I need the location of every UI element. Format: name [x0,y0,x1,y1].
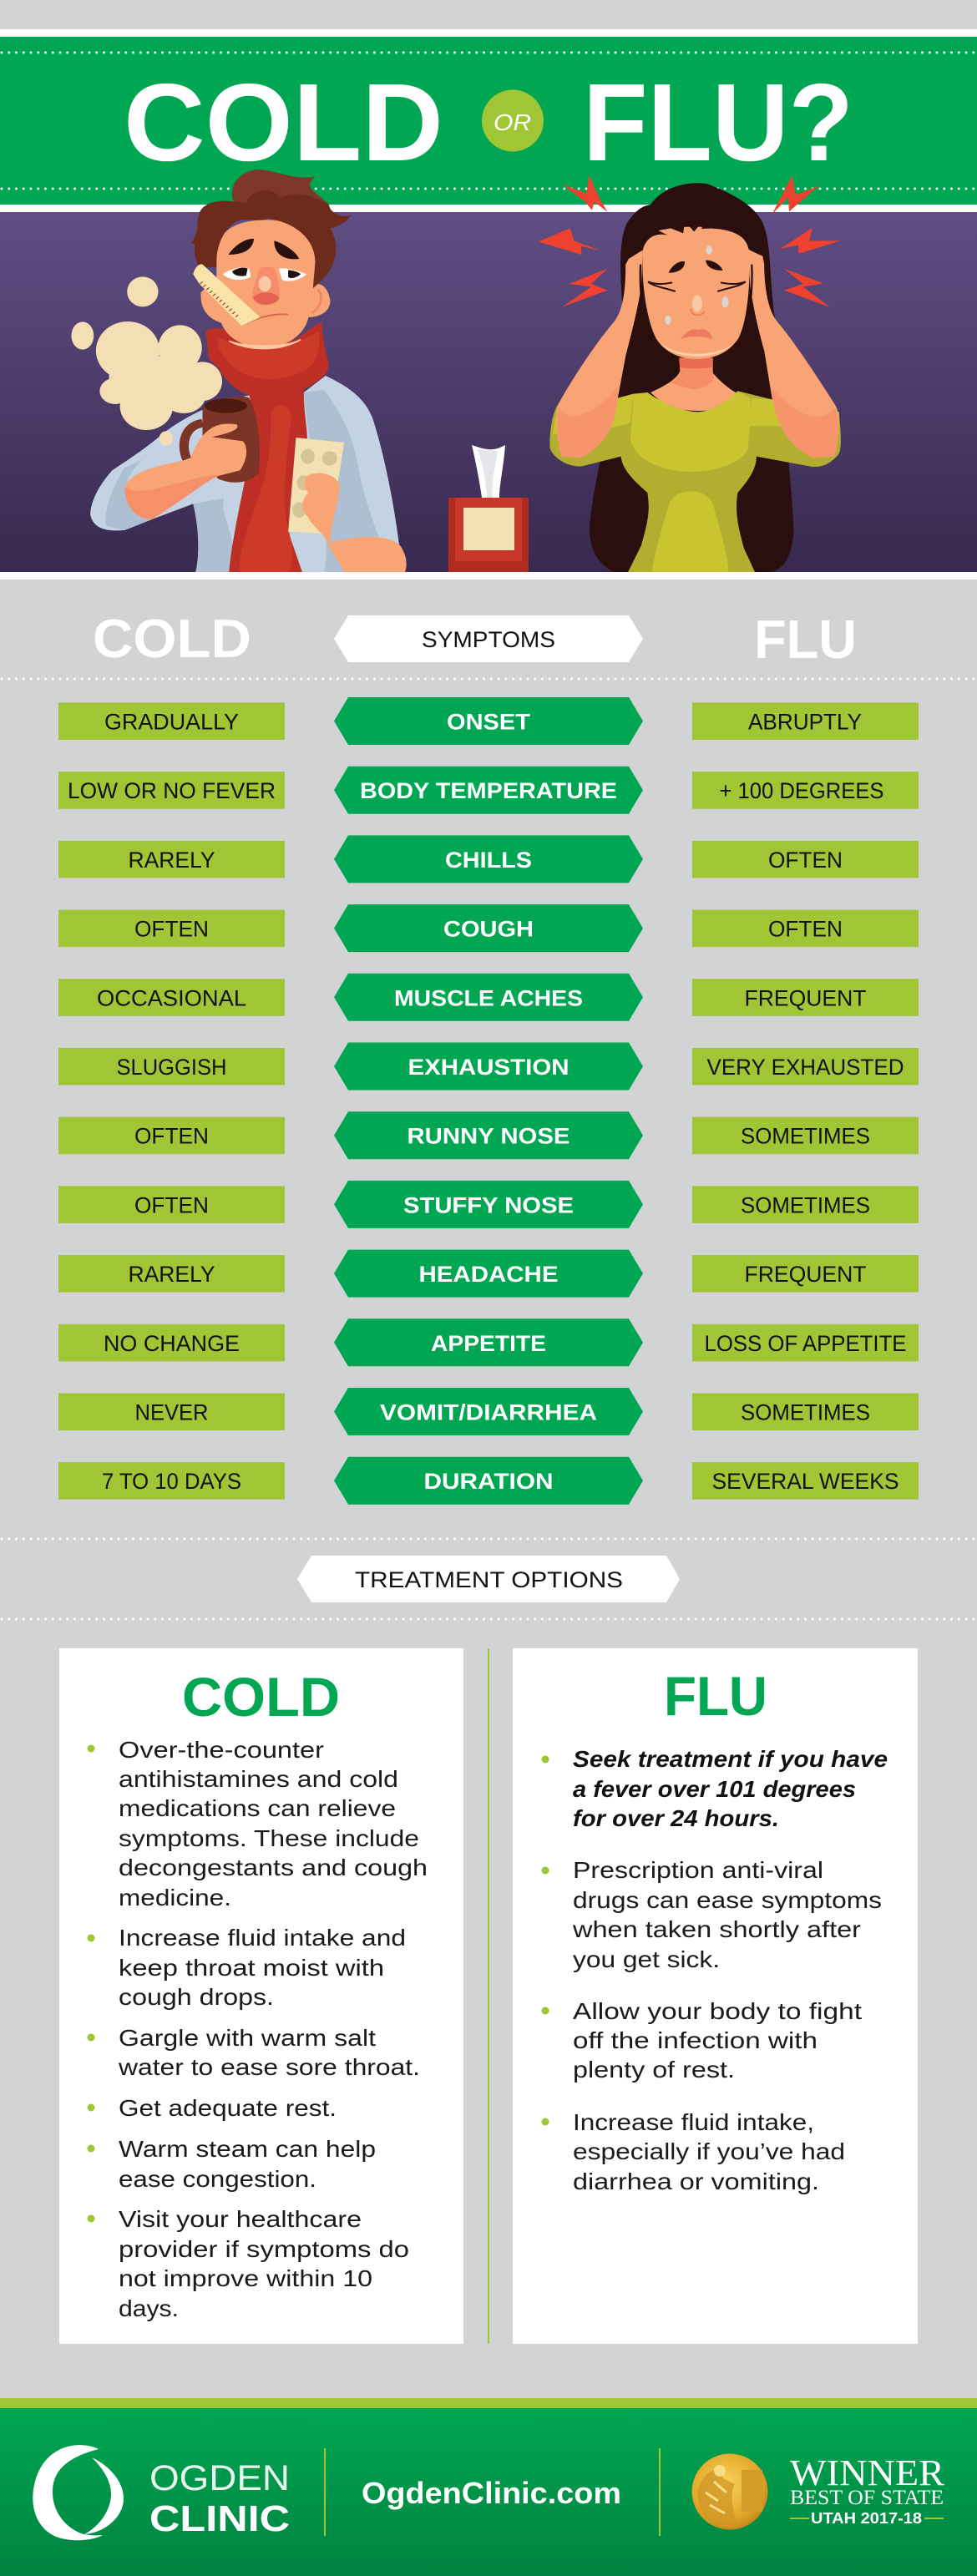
cold bullets: provider if symptoms do [119,2236,409,2262]
flu bullets: especially if you’ve had [573,2138,845,2164]
row: duration: SEVERAL WEEKS [711,1469,899,1494]
row: chills: OFTEN [768,848,843,873]
title: FLU?: FLU? [583,61,853,184]
illustration panel background [0,212,977,572]
flu bullets: for over 24 hours. [573,1805,779,1831]
top [549,391,841,572]
row: duration: 7 TO 10 DAYS [102,1469,241,1494]
steam cloud [71,276,222,446]
row: muscle aches: OCCASIONAL [97,985,246,1010]
row: vomit/diarrhea: VOMIT/DIARRHEA [380,1399,597,1425]
arm holding mug [124,423,246,519]
flu bullets: when taken shortly after [572,1916,861,1942]
cold bullets: Gargle with warm salt [119,2025,376,2051]
cold bullets: Get adequate rest. [119,2095,337,2121]
illustration: woman with headache [539,175,841,572]
row: muscle aches: MUSCLE ACHES [394,985,583,1010]
neck [650,359,737,411]
cold bullets: Increase fluid intake and [119,1925,406,1951]
label: SYMPTOMS: SYMPTOMS [422,627,555,652]
row: muscle aches: FREQUENT [745,985,867,1010]
row: onset [58,697,919,745]
row: headache [58,1250,919,1298]
website: OgdenClinic.com [362,2476,621,2510]
row: cough [58,904,919,952]
award text: WINNER [790,2452,945,2493]
flu bullets: off the infection with [573,2027,818,2053]
cold bullets: medicine. [119,1885,231,1910]
row: body temperature: + 100 DEGREES [720,778,883,803]
cold bullets: Visit your healthcare [119,2206,362,2232]
flu bullets: Seek treatment if you have [573,1746,888,1772]
hand with pills [302,473,407,572]
row: duration [58,1457,919,1505]
row: onset: GRADUALLY [104,710,239,735]
cold bullets: keep throat moist with [119,1955,384,1981]
panel heading: FLU: FLU [664,1665,767,1727]
row: vomit/diarrhea: NEVER [135,1399,209,1425]
row: appetite: LOSS OF APPETITE [705,1331,907,1356]
arms [556,251,643,458]
row: stuffy nose: SOMETIMES [741,1192,870,1217]
hair [190,170,352,288]
award text [790,2452,945,2527]
row: runny nose: SOMETIMES [741,1124,870,1149]
section header: treatment options: TREATMENT OPTIONS [355,1567,623,1592]
label: SYMPTOMS [334,615,643,662]
row: runny nose [58,1111,919,1159]
award text: BEST OF STATE [790,2487,944,2509]
row: headache: HEADACHE [419,1262,558,1287]
symptom comparison table [58,697,919,1505]
face [642,227,750,359]
cold bullets: water to ease sore throat. [118,2054,420,2080]
section header: symptoms [93,608,857,670]
row: exhaustion: EXHAUSTION [408,1055,569,1080]
fringe [641,213,752,251]
row: muscle aches [58,974,919,1021]
mug [184,423,203,459]
row: exhaustion: VERY EXHAUSTED [706,1055,904,1080]
flu bullets: a fever over 101 degrees [573,1776,856,1802]
logo text: OGDEN: OGDEN [149,2458,290,2498]
shirt [90,376,402,572]
cold bullets: ease congestion. [119,2166,316,2192]
panel: flu treatment [513,1648,918,2344]
row: runny nose: RUNNY NOSE [408,1124,569,1149]
row: body temperature: BODY TEMPERATURE [360,778,617,803]
cold bullets [87,1737,428,2321]
row: chills [58,835,919,883]
section header: treatment options [297,1556,680,1602]
man head [190,170,352,348]
brows and eyes [669,261,723,273]
sweat drops [665,245,729,325]
pill pack [288,438,344,534]
row: exhaustion: SLUGGISH [117,1055,227,1080]
footer [0,2398,977,2576]
scarf [205,321,329,572]
cold bullets: symptoms. These include [119,1825,419,1851]
row: exhaustion [58,1042,919,1091]
row: vomit/diarrhea [58,1388,919,1435]
nose [252,267,280,305]
row: stuffy nose: STUFFY NOSE [403,1192,574,1217]
heading: COLD column: COLD [93,608,251,669]
heading: FLU column: FLU [754,609,857,670]
badge: OR [482,90,544,152]
cold bullets: cough drops. [119,1984,274,2010]
cold bullets: decongestants and cough [119,1855,428,1880]
pain bolts [539,175,841,307]
cold bullets: medications can relieve [119,1795,396,1821]
title banner [0,29,977,212]
row: cough: COUGH [443,917,534,942]
row: chills: RARELY [129,848,215,873]
row: appetite [58,1318,919,1366]
flu bullets [541,1746,888,2194]
cold bullets: Warm steam can help [119,2136,376,2162]
cold bullets: Over-the-counter [119,1737,324,1763]
flu bullets: Prescription anti-viral [573,1857,823,1883]
row: cough: OFTEN [768,917,843,942]
flu bullets: you get sick. [573,1946,720,1972]
flu bullets: Increase fluid intake, [573,2109,814,2135]
award text: UTAH 2017-18 [811,2510,922,2527]
illustration: sick man with mug, thermometer and pills [71,170,407,572]
flu bullets: plenty of rest. [573,2057,735,2083]
title: COLD: COLD [124,61,443,184]
row: vomit/diarrhea: SOMETIMES [741,1399,870,1425]
badge: OR: OR [494,109,531,135]
row: appetite: APPETITE [431,1331,546,1356]
row: stuffy nose [58,1181,919,1228]
hair [590,183,794,572]
nose and mouth [692,295,702,311]
flu bullets: drugs can ease symptoms [573,1887,882,1913]
award medal [691,2453,768,2530]
row: cough: OFTEN [134,917,209,942]
logo text: CLINIC: CLINIC [149,2498,290,2539]
cold bullets: not improve within 10 [119,2265,372,2291]
brows and eyes [228,239,299,259]
row: runny nose: OFTEN [134,1124,209,1149]
row: duration: DURATION [424,1469,553,1494]
row: chills: CHILLS [445,848,532,873]
cold bullets: antihistamines and cold [119,1766,398,1792]
cold bullets: days. [119,2295,179,2321]
logo mark [33,2445,124,2540]
flu bullets: Allow your body to fight [573,1998,862,2024]
row: headache: RARELY [129,1262,215,1287]
flu bullets: diarrhea or vomiting. [573,2169,819,2194]
illustration: tissue box [448,445,529,572]
row: appetite: NO CHANGE [104,1331,240,1356]
row: onset: ABRUPTLY [748,710,862,735]
panel heading: COLD: COLD [182,1666,340,1728]
row: stuffy nose: OFTEN [134,1192,209,1217]
row: onset: ONSET [447,710,531,735]
panel: cold treatment [59,1648,463,2344]
row: headache: FREQUENT [745,1262,867,1287]
thermometer [193,264,261,326]
row: body temperature: LOW OR NO FEVER [68,778,276,803]
row: body temperature [58,767,919,814]
